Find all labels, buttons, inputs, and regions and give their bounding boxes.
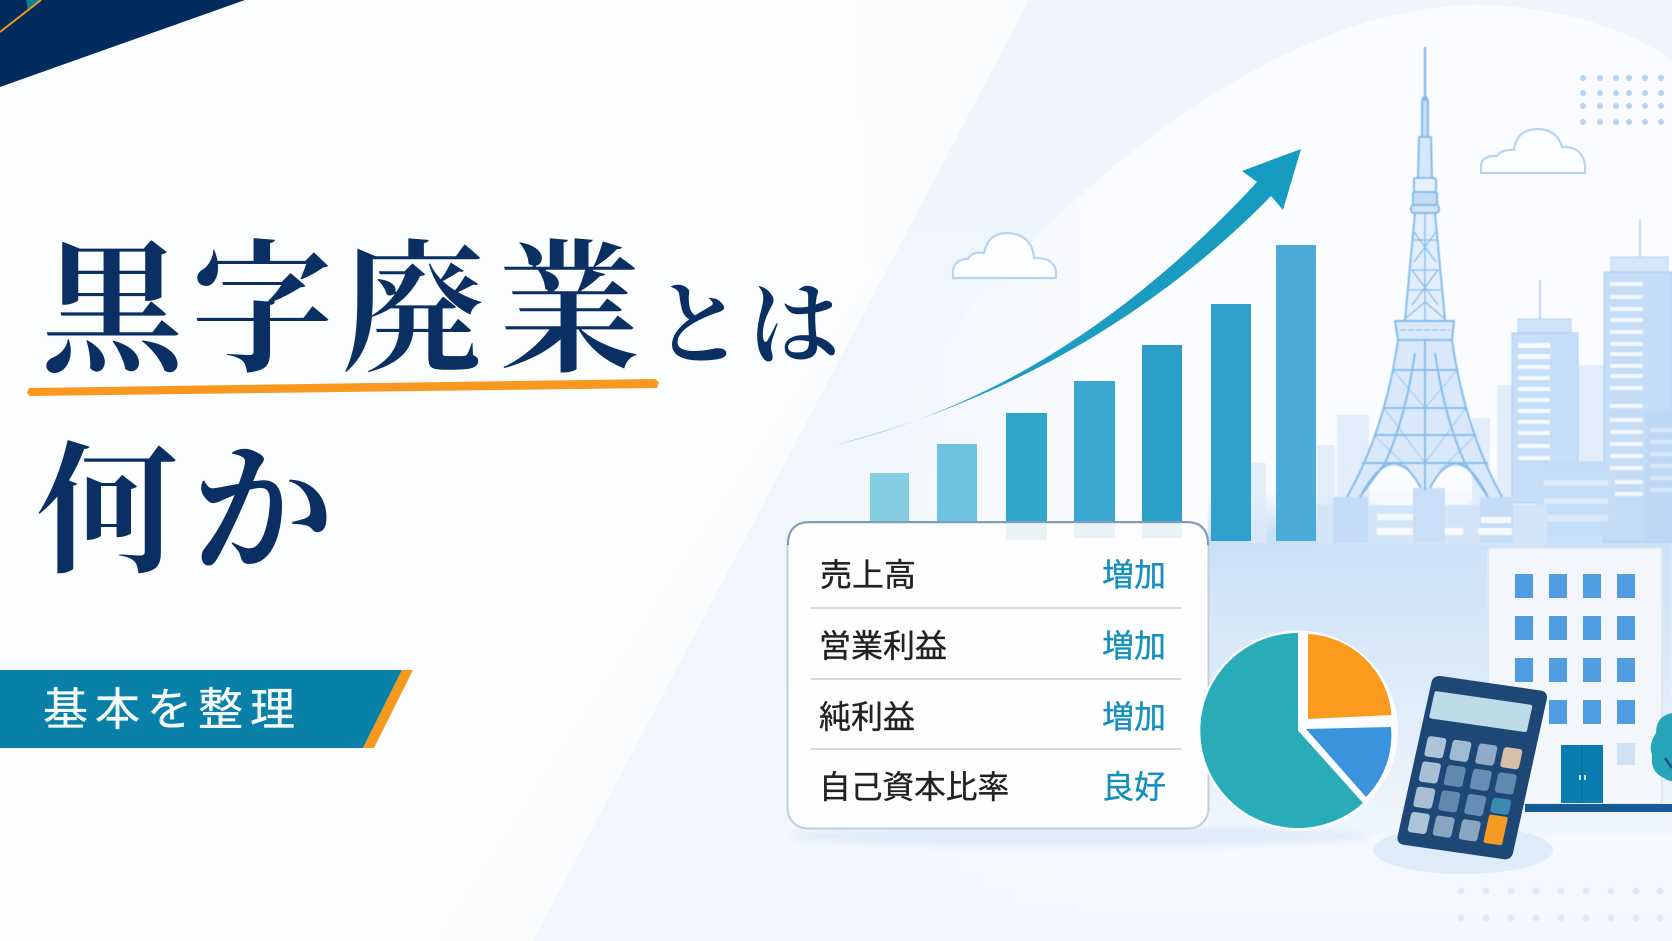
row: 営業利益 <box>819 628 1166 664</box>
icon: cloud left <box>953 233 1056 278</box>
icon: Tokyo Tower <box>1347 47 1502 497</box>
background buildings <box>1250 365 1604 545</box>
panel: financial table card <box>788 522 1208 828</box>
low building cluster <box>1537 461 1615 536</box>
pie chart <box>1198 630 1398 830</box>
bar chart <box>870 245 1316 541</box>
corner accent <box>0 0 245 87</box>
row: 自己資本比率 <box>819 769 1166 805</box>
building B <box>1604 219 1672 542</box>
row: 営業利益: 営業利益 <box>819 628 947 664</box>
row: 売上高 <box>820 557 1166 593</box>
dot pattern: top right <box>1580 75 1664 125</box>
arrow: growth trend <box>835 149 1301 445</box>
row: 純利益: 純利益 <box>819 699 915 735</box>
icon: tree <box>1651 713 1672 781</box>
title: 黒字廃業とは: とは <box>652 275 840 377</box>
row: 営業利益: 増加 <box>1102 628 1166 664</box>
building A <box>1512 280 1578 503</box>
title: 何か: 何か <box>36 434 334 592</box>
tower base buildings <box>1317 488 1547 545</box>
icon: cloud right <box>1481 129 1585 173</box>
row: 自己資本比率: 良好 <box>1102 769 1166 805</box>
office building <box>1488 548 1662 804</box>
calculator shadow <box>1373 826 1553 874</box>
row: 純利益 <box>819 699 1166 735</box>
subtitle banner <box>0 670 413 748</box>
ground line <box>1525 804 1672 812</box>
card shadow <box>790 826 1370 846</box>
dot pattern: bottom right <box>1458 888 1664 922</box>
row: 売上高: 売上高 <box>820 557 916 593</box>
title: 黒字廃業とは: 黒字廃業 <box>40 233 641 392</box>
row: 売上高: 増加 <box>1102 557 1166 593</box>
icon: calculator <box>1396 675 1548 860</box>
row: 自己資本比率: 自己資本比率 <box>819 769 1009 805</box>
row: 純利益: 増加 <box>1102 699 1166 735</box>
subtitle banner: 基本を整理 <box>43 684 295 735</box>
haze <box>1208 490 1672 835</box>
city skyline <box>1208 47 1672 835</box>
title underline <box>27 379 659 396</box>
